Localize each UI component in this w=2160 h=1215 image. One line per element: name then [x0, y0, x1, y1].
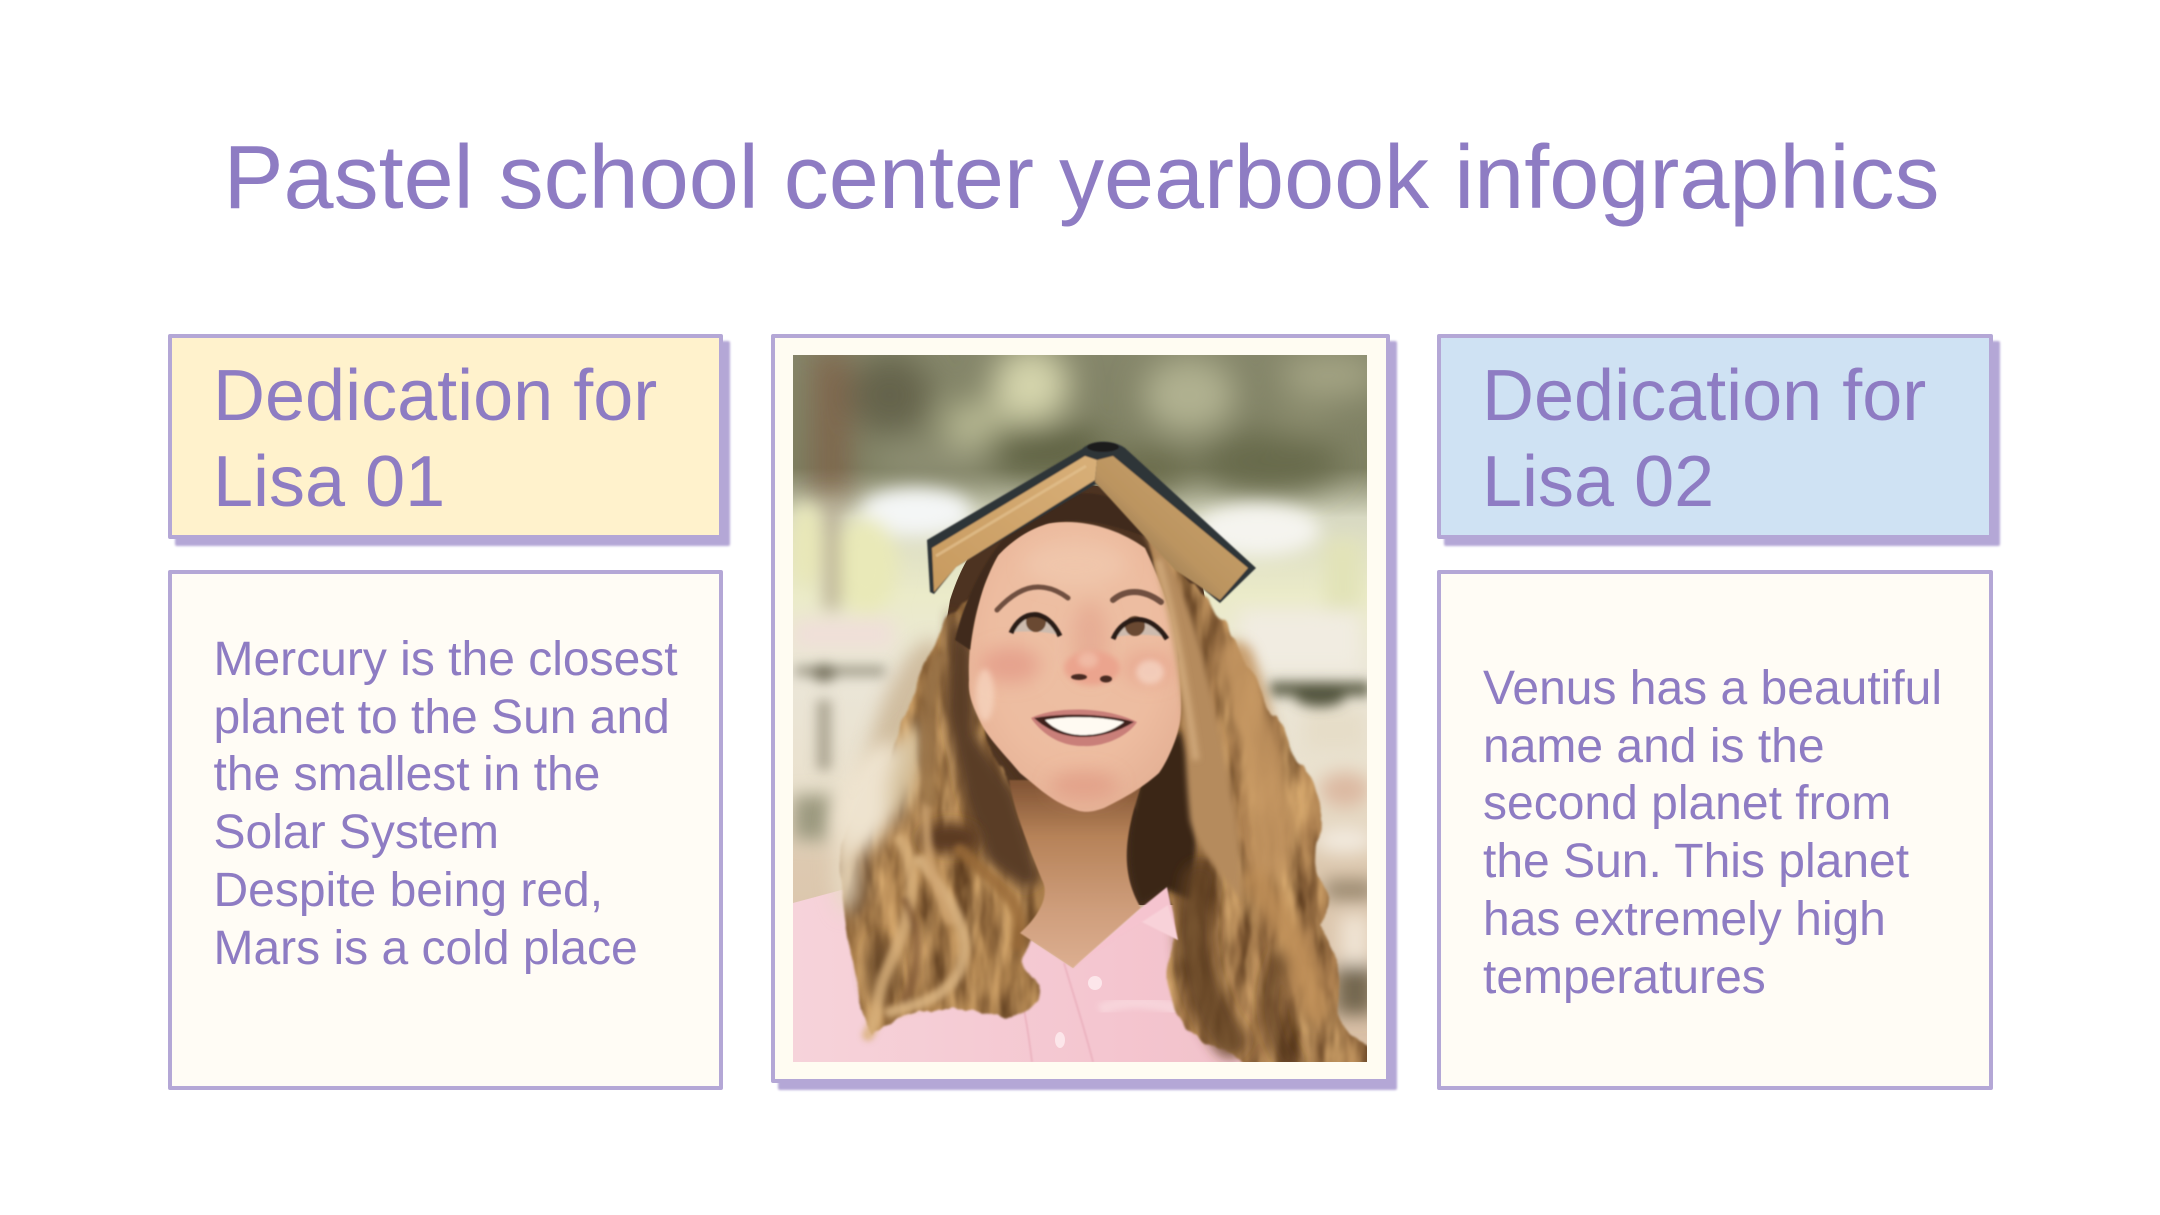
text block: Lisa 01	[214, 633, 678, 975]
face	[955, 493, 1241, 900]
shirt	[793, 890, 1242, 1062]
eyes	[1011, 612, 1167, 639]
text block: Lisa 02: name and is the	[1483, 720, 1825, 773]
title: Pastel school center yearbook infographics	[224, 128, 1939, 228]
text block: Lisa 01: the smallest in the	[214, 748, 600, 801]
heading: Lisa 02: Dedication for	[1482, 356, 1926, 436]
text block: Lisa 01: planet to the Sun and	[214, 691, 670, 744]
text block: Lisa 01: Mercury is the closest	[214, 633, 678, 686]
text block: Lisa 02: the Sun. This planet	[1483, 835, 1909, 888]
hair strand over the right side of the face	[1140, 525, 1241, 900]
eyebrows	[997, 587, 1161, 610]
panel: photo frame	[771, 334, 1390, 1083]
text block: Lisa 02	[1483, 662, 1942, 1004]
heading: Lisa 02: Lisa 02	[1482, 442, 1714, 522]
nose	[1064, 651, 1120, 685]
mouth	[1031, 710, 1137, 746]
heading: Lisa 01: Dedication for	[213, 356, 657, 436]
panel: dedication 02 text	[1437, 570, 1993, 1090]
text block: Lisa 02: Venus has a beautiful	[1483, 662, 1942, 715]
hairline shadow	[955, 493, 1155, 650]
panel: dedication 02 heading	[1437, 334, 1993, 539]
panel: dedication 01 text	[168, 570, 723, 1090]
dark hair shadow left of the face	[945, 610, 1042, 890]
left hair strands	[868, 660, 1020, 1035]
text block: Lisa 02: has extremely high	[1483, 893, 1886, 946]
text block: Lisa 01: Mars is a cold place	[214, 922, 638, 975]
text block: Lisa 02: second planet from	[1483, 777, 1891, 830]
hair: left and right masses	[815, 528, 1372, 1075]
text block: Lisa 01: Despite being red,	[214, 864, 603, 917]
dark hair right of the neck and curls	[1128, 730, 1197, 905]
pale sunlit hair on the left	[815, 720, 931, 914]
neck	[1009, 780, 1143, 968]
text block: Lisa 02: temperatures	[1483, 951, 1766, 1004]
photo: smiling girl with a book on her head	[793, 355, 1367, 1062]
book on head	[927, 442, 1256, 603]
heading: Lisa 02	[1482, 356, 1926, 522]
panel: dedication 01 heading	[168, 334, 723, 539]
photo background	[790, 347, 1380, 1062]
heading: Lisa 01	[213, 356, 657, 522]
shirt collar	[1073, 887, 1178, 968]
hair: back mass behind the face	[947, 486, 1205, 905]
heading: Lisa 01: Lisa 01	[213, 442, 445, 522]
text block: Lisa 01: Solar System	[214, 806, 499, 859]
